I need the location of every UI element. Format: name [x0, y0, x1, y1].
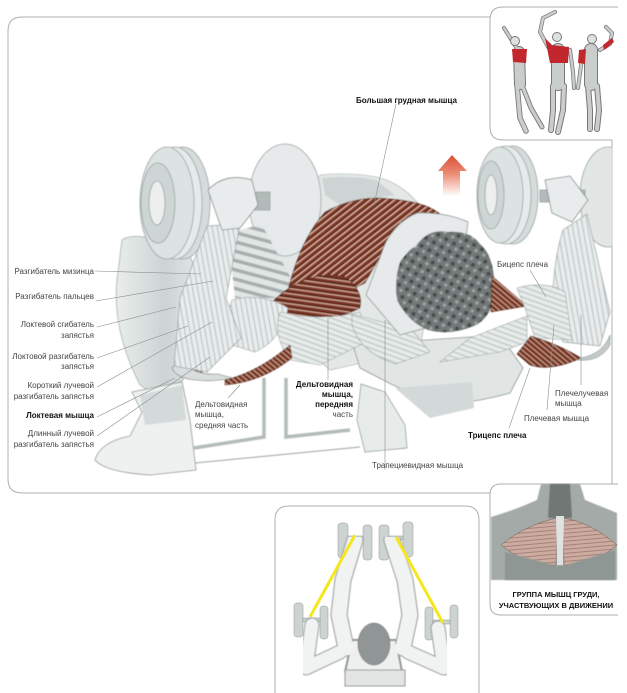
labels: right muscles: мышца: [555, 399, 582, 408]
bench pad: [353, 335, 523, 404]
left upper arm: [225, 297, 288, 352]
caption: [499, 590, 613, 610]
label: middle deltoid: [195, 400, 248, 430]
triceps: [517, 336, 581, 367]
label: middle deltoid: мышца,: [195, 410, 224, 419]
labels: left muscles: запястья: [61, 331, 94, 340]
dumbbells: [294, 522, 458, 640]
labels: left muscles: [12, 267, 95, 449]
labels: left muscles: Разгибатель пальцев: [15, 292, 94, 301]
labels: left muscles: Длинный лучевой: [28, 429, 94, 438]
figure: side left: [504, 28, 542, 131]
labels: left muscles: Короткий лучевой: [27, 381, 94, 390]
hair: [396, 231, 494, 332]
left hand: [208, 178, 258, 230]
labels: right muscles: Трапециевидная мышца: [372, 461, 464, 470]
label: middle deltoid: Дельтовидная: [195, 400, 247, 409]
bench frame: [194, 378, 350, 448]
head: [366, 213, 468, 335]
label: anterior deltoid: часть: [333, 410, 353, 419]
shoulder: [278, 312, 370, 365]
pectoral muscles: [501, 518, 557, 565]
left dumbbell: [140, 144, 321, 259]
labels: right muscles: [372, 260, 608, 470]
labels: left muscles: Локтовой разгибатель: [12, 352, 94, 361]
right pectoral wedge: [491, 276, 527, 312]
labels: left muscles: разгибатель запястья: [14, 440, 94, 449]
label: anterior deltoid: передняя: [315, 400, 353, 409]
label: anterior deltoid: мышца,: [322, 390, 353, 399]
caption: УЧАСТВУЮЩИХ В ДВИЖЕНИИ: [499, 601, 613, 610]
panel: movement inset: [275, 506, 479, 693]
panel: main illustration frame: [8, 17, 612, 493]
pectoralis major: [288, 198, 441, 300]
label: anterior deltoid: Дельтовидная: [296, 380, 353, 389]
labels: left muscles: Локтевая мышца: [26, 411, 95, 420]
chest illustration: [491, 484, 617, 580]
anterior deltoid: [270, 275, 361, 318]
figure: front middle: [540, 12, 574, 132]
labels: right muscles: Трицепс плеча: [468, 431, 527, 440]
illustration: lifter on bench: [95, 144, 627, 475]
abdomen: [505, 550, 615, 580]
caption: ГРУППА МЫШЦ ГРУДИ,: [512, 590, 600, 599]
panel: muscle map inset: [490, 7, 618, 140]
head: [358, 623, 390, 665]
labels: left muscles: запястья: [61, 362, 94, 371]
icon: red upward arrow: [438, 155, 467, 196]
upper chest shading: [322, 177, 395, 205]
leg and knee: [116, 236, 205, 395]
biceps: [517, 285, 572, 340]
labels: left muscles: Разгибатель мизинца: [14, 267, 95, 276]
right dumbbell: [477, 146, 627, 247]
middle deltoid strip: [225, 345, 292, 385]
labels: left muscles: разгибатель запястья: [14, 392, 94, 401]
lifter from above: [306, 540, 444, 686]
labels: right muscles: Плечелучевая: [555, 389, 608, 398]
floor line: [195, 447, 360, 463]
panel: chest muscles inset: [490, 484, 618, 615]
yellow line: right arm path: [396, 537, 443, 623]
label: middle deltoid: средняя часть: [195, 421, 248, 430]
ribs: [228, 225, 292, 298]
right shoe: [357, 384, 407, 452]
torso behind: [250, 174, 440, 370]
left shoe: [95, 382, 196, 475]
figure: back right: [578, 27, 614, 129]
leader lines: [95, 104, 581, 470]
label: pectoralis major: Большая грудная мышца: [356, 96, 457, 105]
yellow line: left arm path: [310, 535, 355, 617]
labels: right muscles: Плечевая мышца: [524, 414, 590, 423]
left forearm: [174, 224, 241, 372]
labels: right muscles: Бицепс плеча: [497, 260, 549, 269]
trapezius: [352, 314, 430, 364]
labels: left muscles: Локтевой сгибатель: [21, 320, 94, 329]
right hand: [545, 176, 588, 222]
right forearm: [553, 214, 610, 346]
label: anterior deltoid: [296, 380, 353, 419]
